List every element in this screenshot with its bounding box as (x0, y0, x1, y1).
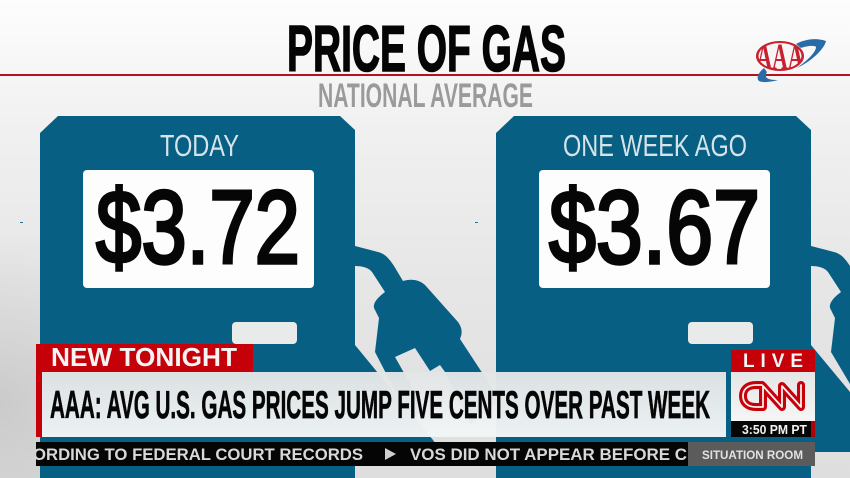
title: PRICE OF GAS (287, 12, 566, 85)
cnn live bug: 3:50 PM PT (742, 422, 807, 437)
pump lower wedge (355, 345, 441, 452)
small tick marks (20, 222, 478, 223)
show name tag (688, 442, 815, 466)
logo: AAA: AAA (756, 37, 804, 78)
logo panel (731, 372, 815, 421)
live label (731, 350, 815, 372)
price display (539, 170, 770, 288)
pump lower wedge (811, 345, 850, 452)
cnn live bug: LIVE (743, 351, 803, 372)
show name tag: SITUATION ROOM (702, 448, 803, 462)
red tab (36, 344, 253, 437)
price display (83, 170, 314, 288)
time strip (731, 421, 815, 437)
pump nozzle and hose (811, 246, 850, 478)
pump slot (688, 322, 753, 344)
pump nozzle and hose (355, 246, 500, 425)
red header rule (0, 74, 850, 76)
headline panel (42, 372, 726, 437)
cnn live bug (731, 350, 815, 437)
price: $3.67: $3.67 (549, 170, 760, 286)
panel: today pump (40, 116, 500, 478)
pump body (40, 116, 355, 478)
pump body (496, 116, 811, 478)
label: one week ago: ONE WEEK AGO (563, 128, 747, 163)
lower third banner (36, 344, 726, 437)
logo: CNN (743, 385, 801, 407)
panel: one week ago pump (496, 116, 850, 478)
subtitle: NATIONAL AVERAGE (318, 77, 533, 115)
ticker arrow (385, 448, 396, 460)
news ticker (33, 442, 688, 466)
price: $3.72: $3.72 (96, 170, 300, 286)
label: today: TODAY (160, 128, 239, 163)
pump slot (232, 322, 297, 344)
ticker text two: VOS DID NOT APPEAR BEFORE C (410, 445, 687, 464)
new tonight label: NEW TONIGHT (51, 344, 237, 372)
ticker text one: ORDING TO FEDERAL COURT RECORDS (33, 445, 363, 464)
